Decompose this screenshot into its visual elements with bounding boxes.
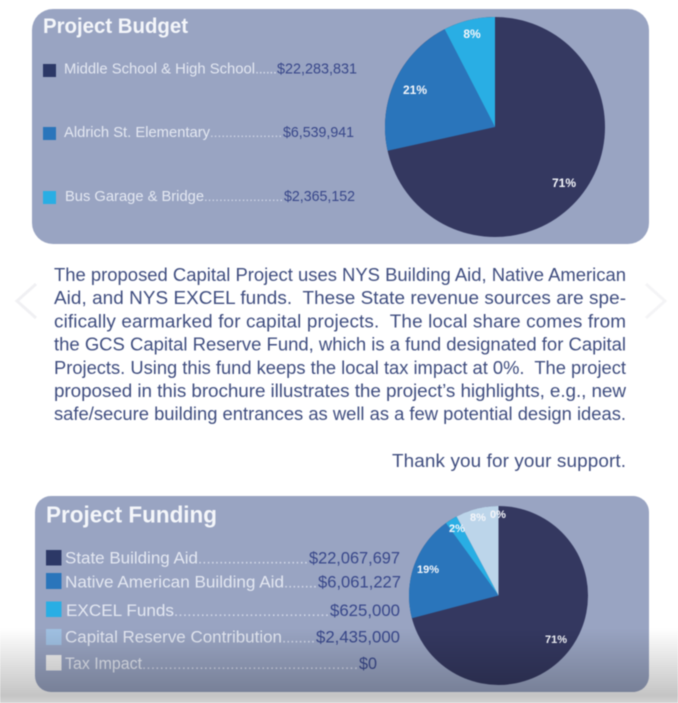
legend item: aldrich st elementary (43, 124, 354, 141)
legend item: middle and high school: ...... (255, 60, 277, 78)
legend item: bus garage and bridge: ..................... (204, 189, 283, 204)
pie chart: funding shares: 71% (545, 634, 567, 646)
legend item: tax impact (46, 654, 377, 673)
pie chart: budget shares (385, 17, 605, 237)
text block: capital project description: proposed in this brochure illustrates the project’s highlights, e.g., new (54, 381, 626, 402)
legend item: capital reserve contribution: Capital Reserve Contribution (65, 628, 282, 646)
text block: capital project description: Aid, and NYS EXCEL funds. These State revenue sources are spe- (54, 288, 626, 309)
legend item: state building aid: .......................... (198, 550, 308, 568)
legend item: excel funds (46, 601, 400, 620)
legend item: state building aid (46, 548, 400, 568)
icon: previous arrow (17, 284, 36, 318)
pie chart: budget shares: 21% (403, 83, 427, 97)
legend item: aldrich st elementary: ................... (210, 125, 282, 140)
panel: project budget (32, 9, 649, 244)
text block: capital project description: Thank you for your support. (392, 451, 626, 472)
legend item: native american building aid: Native American Building Aid (65, 572, 284, 592)
legend item: bus garage and bridge: Bus Garage & Bridge (65, 188, 204, 205)
heading: project funding: Project Funding (46, 502, 217, 528)
pie chart: funding shares: 2% (449, 523, 465, 535)
pie chart: budget shares: 8% (463, 27, 481, 41)
panel: project funding (35, 496, 649, 692)
text block: capital project description: safe/secure building entrances as well as a few potential design ideas. (54, 404, 626, 425)
legend item: native american building aid (46, 572, 401, 592)
legend item: bus garage and bridge: $2,365,152 (284, 188, 355, 205)
legend item: aldrich st elementary: $6,539,941 (283, 124, 354, 141)
legend item: capital reserve contribution: ........ (282, 630, 315, 646)
legend item: excel funds: $625,000 (330, 601, 400, 620)
heading: project budget: Project Budget (43, 15, 188, 38)
legend: budget items (43, 60, 357, 205)
text block: capital project description: The proposed Capital Project uses NYS Building Aid, Native American (54, 265, 626, 286)
pie chart: funding shares: 19% (417, 564, 439, 576)
legend: funding sources (46, 548, 401, 673)
pie chart: funding shares: 0% (490, 509, 506, 521)
legend item: tax impact: $0 (359, 654, 377, 673)
legend item: state building aid: $22,067,697 (309, 548, 400, 568)
legend item: middle and high school: Middle School & High School (64, 60, 255, 78)
legend item: native american building aid: ........ (284, 574, 317, 592)
legend item: bus garage and bridge (43, 188, 355, 205)
pie chart: funding shares: 8% (470, 512, 486, 524)
legend item: excel funds: EXCEL Funds (66, 601, 174, 620)
legend item: tax impact: Tax Impact (65, 654, 142, 673)
legend item: capital reserve contribution (46, 628, 400, 646)
panel background (32, 9, 649, 244)
legend item: excel funds: ................................... (174, 603, 329, 620)
legend item: capital reserve contribution: $2,435,000 (316, 628, 400, 646)
icon: next arrow (646, 284, 665, 318)
pie chart: budget shares: 71% (552, 176, 576, 190)
text block: capital project description: Projects. Using this fund keeps the local tax impact at 0%. The project (54, 358, 627, 379)
legend item: tax impact: ................................................. (142, 656, 358, 673)
legend item: middle and high school: $22,283,831 (277, 60, 357, 78)
text block: capital project description (54, 265, 627, 472)
funding panel background (35, 496, 649, 692)
pie chart: funding shares (409, 506, 588, 685)
legend item: native american building aid: $6,061,227 (318, 572, 401, 592)
text block: capital project description: the GCS Capital Reserve Fund, which is a fund designated for Capital (54, 334, 626, 356)
legend item: state building aid: State Building Aid (65, 548, 198, 568)
legend item: aldrich st elementary: Aldrich St. Elementary (64, 124, 210, 141)
legend item: middle and high school (43, 60, 357, 78)
text block: capital project description: cifically earmarked for capital projects. The local share comes from (54, 312, 626, 332)
